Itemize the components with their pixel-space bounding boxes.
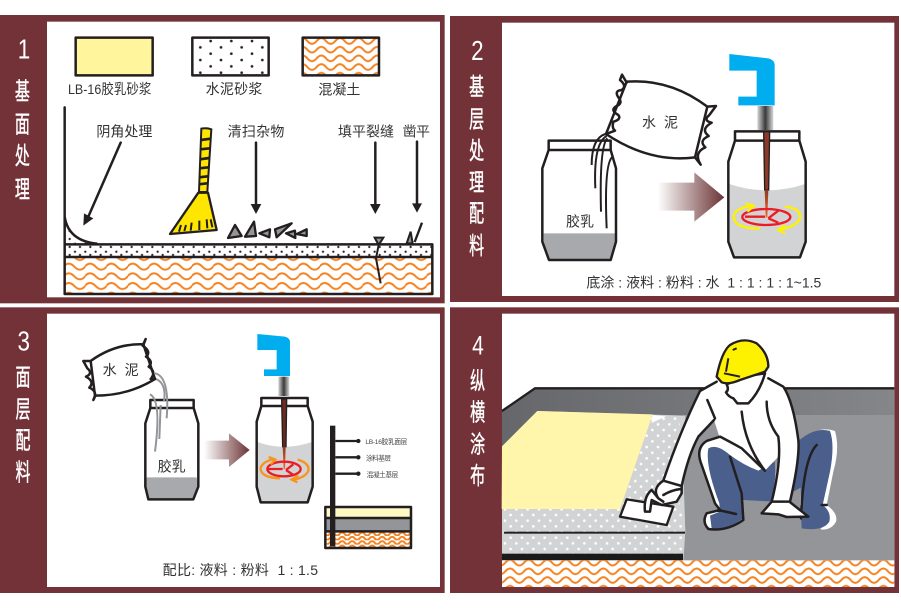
hard hat <box>717 340 768 383</box>
vertical title: 基层处理配料: 配 <box>469 201 484 227</box>
vertical title: 纵横涂布 <box>470 367 485 490</box>
latex jar: 胶乳 <box>158 459 186 475</box>
primer ratio caption: 底涂 : 液料 : 粉料 : 水 1 : 1 : 1 : 1~1.5 <box>586 275 822 291</box>
trowel <box>620 499 673 525</box>
mixer jar with stirrer <box>257 334 313 502</box>
panel 1: base surface treatment <box>0 15 445 303</box>
step number 2: 2 <box>471 36 484 67</box>
layer labels <box>365 437 408 479</box>
clothing outlines <box>663 378 827 529</box>
vertical title: 面层配料: 料 <box>16 459 30 487</box>
cement bag: 水 泥 <box>642 114 678 130</box>
vertical title: 面层配料: 配 <box>16 428 30 454</box>
chisel bump <box>407 223 422 243</box>
roof surface <box>502 388 894 561</box>
layer labels: 混凝土基层 <box>367 470 399 479</box>
vertical title: 纵横涂布: 涂 <box>470 431 485 458</box>
panel 2: primer mixing <box>450 16 899 302</box>
icon: broom <box>170 128 217 234</box>
trousers <box>699 429 837 530</box>
vertical title: 面层配料: 面 <box>16 365 30 392</box>
flow arrow <box>658 172 724 222</box>
vertical title: 基面处理: 面 <box>15 112 30 138</box>
legend: cement mortar <box>192 38 269 97</box>
crack detail <box>375 238 383 283</box>
callout: fill cracks: 填平裂缝 <box>338 124 394 140</box>
legend: LB-16 latex mortar <box>68 38 153 97</box>
yellow coating area <box>502 411 666 509</box>
vertical title: 纵横涂布: 布 <box>470 462 485 490</box>
callout: sweep debris: 清扫杂物 <box>228 124 284 140</box>
wall and floor layers <box>65 107 432 294</box>
callout: fill cracks <box>338 124 394 214</box>
latex jar: 胶乳 <box>566 214 594 230</box>
layer labels: LB-16胶乳面层 <box>365 437 408 446</box>
callout: sweep debris <box>228 124 284 214</box>
debris shards <box>228 222 307 238</box>
mixer jar with stirrer <box>728 54 806 257</box>
cement stream <box>592 134 612 228</box>
callout: chisel flat <box>403 124 430 213</box>
vertical title: 面层配料: 层 <box>16 397 30 423</box>
callout: corner treatment: 阴角处理 <box>96 124 152 140</box>
layer labels: 涂料基层 <box>366 453 391 462</box>
vertical title: 基面处理: 理 <box>15 177 30 203</box>
step number 1: 1 <box>18 34 30 65</box>
panel 3: top coat mixing <box>0 307 445 593</box>
vertical title: 基面处理: 基 <box>15 78 30 106</box>
layer diagram <box>325 426 411 548</box>
gloved hand <box>645 481 682 512</box>
vertical title: 纵横涂布: 纵 <box>470 367 485 395</box>
layer edge lines <box>502 532 685 560</box>
vertical title: 纵横涂布: 横 <box>470 399 485 427</box>
step number 4: 4 <box>472 331 484 361</box>
latex jar <box>542 141 616 260</box>
legend: concrete: 混凝土 <box>318 82 360 98</box>
callout: chisel flat: 凿平 <box>403 124 430 140</box>
resting hand <box>762 502 808 517</box>
vertical title: 基层处理配料: 层 <box>469 107 484 133</box>
head <box>726 373 765 403</box>
panel 4: crosswise coating <box>450 307 899 593</box>
vertical title: 基层处理配料: 理 <box>469 170 484 197</box>
cement stream <box>150 373 167 452</box>
flow arrow <box>204 433 250 467</box>
topcoat ratio caption: 配比: 液料 : 粉料 1 : 1.5 <box>163 562 318 578</box>
cement bag: 水 泥 <box>103 362 139 378</box>
shirt <box>663 372 799 502</box>
callout: corner treatment <box>83 124 152 226</box>
vertical title: 基层处理配料: 处 <box>469 137 484 165</box>
legend: concrete <box>303 38 379 98</box>
cement bag <box>606 75 716 165</box>
vertical title: 基层处理配料: 基 <box>469 73 484 101</box>
legend: cement mortar: 水泥砂浆 <box>206 81 262 97</box>
vertical title: 面层配料 <box>16 365 30 487</box>
vertical title: 基面处理 <box>15 78 30 203</box>
worker <box>620 340 837 530</box>
vertical title: 基层处理配料 <box>469 73 484 260</box>
legend: LB-16 latex mortar: LB-16胶乳砂浆 <box>68 81 151 97</box>
step number 3: 3 <box>17 326 30 357</box>
vertical title: 基层处理配料: 料 <box>469 232 484 260</box>
cement bag <box>83 339 155 400</box>
concrete band <box>502 560 894 587</box>
vertical title: 基面处理: 处 <box>15 142 30 170</box>
latex jar <box>145 400 198 499</box>
